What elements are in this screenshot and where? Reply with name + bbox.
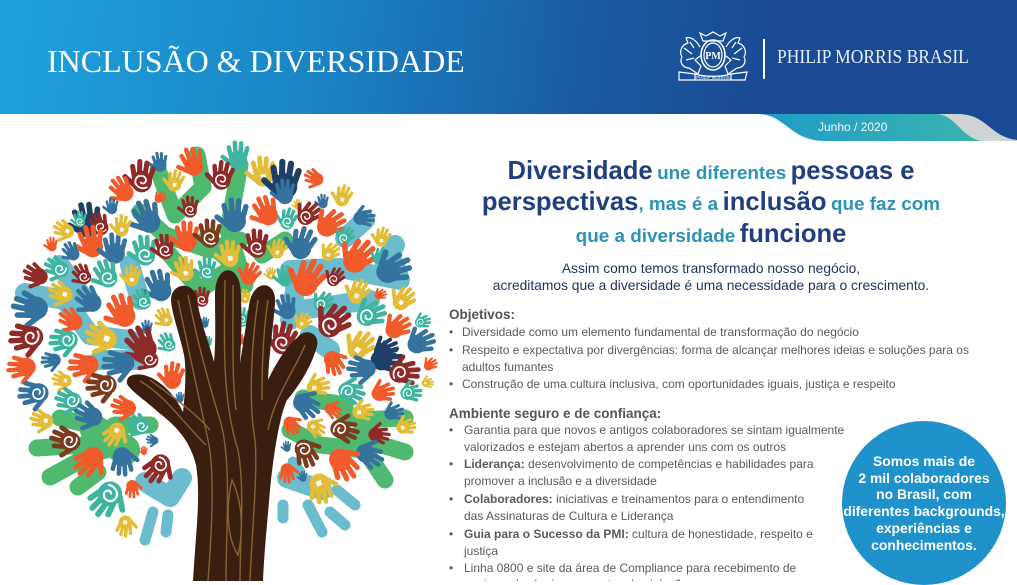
safe environment list: justiça — [464, 544, 498, 558]
date label: Junho / 2020 — [818, 120, 887, 134]
subheading: Assim como temos transformado nosso negócio, — [562, 261, 860, 276]
objectives list: Construção de uma cultura inclusiva, com oportunidades iguais, justiça e respeito — [462, 377, 896, 391]
icon: Philip Morris crest — [678, 31, 748, 81]
callout text: no Brasil, com — [876, 486, 972, 502]
logo divider — [763, 39, 765, 79]
safe environment list: Guia para o Sucesso da PMI: cultura de honestidade, respeito e — [464, 527, 813, 541]
company name: PHILIP MORRIS BRASIL — [777, 47, 969, 68]
objectives list: adultos fumantes — [462, 360, 553, 374]
callout text: conhecimentos. — [871, 537, 977, 553]
safe environment list: das Assinaturas de Cultura e Liderança — [464, 509, 673, 523]
tree trunk shaped like a hand — [127, 270, 317, 581]
safe environment list: • — [449, 527, 453, 541]
callout text: Somos mais de — [873, 453, 975, 469]
safe environment list: Colaboradores: iniciativas e treinamentos para o entendimento — [464, 492, 804, 506]
callout text: 2 mil colaboradores — [858, 470, 990, 486]
callout text: experiências e — [876, 520, 972, 536]
title: INCLUSÃO & DIVERSIDADE — [47, 43, 465, 79]
safe environment list: promover a inclusão e a diversidade — [464, 474, 657, 488]
headline line 3: que a diversidade funcione — [576, 220, 846, 248]
safe environment list: Linha 0800 e site da área de Compliance para recebimento de — [464, 561, 796, 575]
date ribbon — [758, 114, 1017, 141]
objectives list: Respeito e expectativa por divergências: forma de alcançar melhores ideias e soluções para os — [462, 343, 969, 357]
objectives list: • — [449, 343, 453, 357]
headline — [482, 157, 940, 248]
icon: Philip Morris crest: PM — [705, 51, 721, 62]
canopy of coloured hands — [9, 143, 439, 538]
safe environment list: • — [449, 492, 453, 506]
callout text: diferentes backgrounds, — [843, 503, 1005, 519]
callout text — [843, 453, 1005, 553]
tree illustration — [6, 140, 438, 581]
headline line 1: Diversidade une diferentes pessoas e — [508, 157, 914, 185]
green and light-blue background blobs — [25, 155, 405, 540]
safe environment list: • — [449, 561, 453, 575]
objectives heading: Objetivos: — [449, 307, 515, 322]
safe environment list: • — [449, 457, 453, 471]
safe environment list: Garantia para que novos e antigos colaboradores se sintam igualmente — [464, 423, 844, 437]
subheading: acreditamos que a diversidade é uma necessidade para o crescimento. — [493, 278, 929, 293]
objectives list — [449, 325, 969, 391]
icon: Philip Morris crest: PHILIP MORRIS — [696, 75, 730, 80]
safe environment list — [449, 423, 844, 581]
objectives list: • — [449, 377, 453, 391]
safe environment list: Liderança: desenvolvimento de competências e habilidades para — [464, 457, 814, 471]
safe environment list: valorizados e estejam abertos a aprender uns com os outros — [464, 440, 786, 454]
objectives list: • — [449, 325, 453, 339]
callout circle — [842, 421, 1006, 585]
headline line 2: perspectivas, mas é a inclusão que faz com — [482, 188, 940, 216]
objectives list: Diversidade como um elemento fundamental de transformação do negócio — [462, 325, 859, 339]
safe environment list: • — [449, 423, 453, 437]
header band — [0, 0, 1017, 114]
subheading — [493, 261, 929, 293]
safe environment heading: Ambiente seguro e de confiança: — [449, 406, 661, 421]
